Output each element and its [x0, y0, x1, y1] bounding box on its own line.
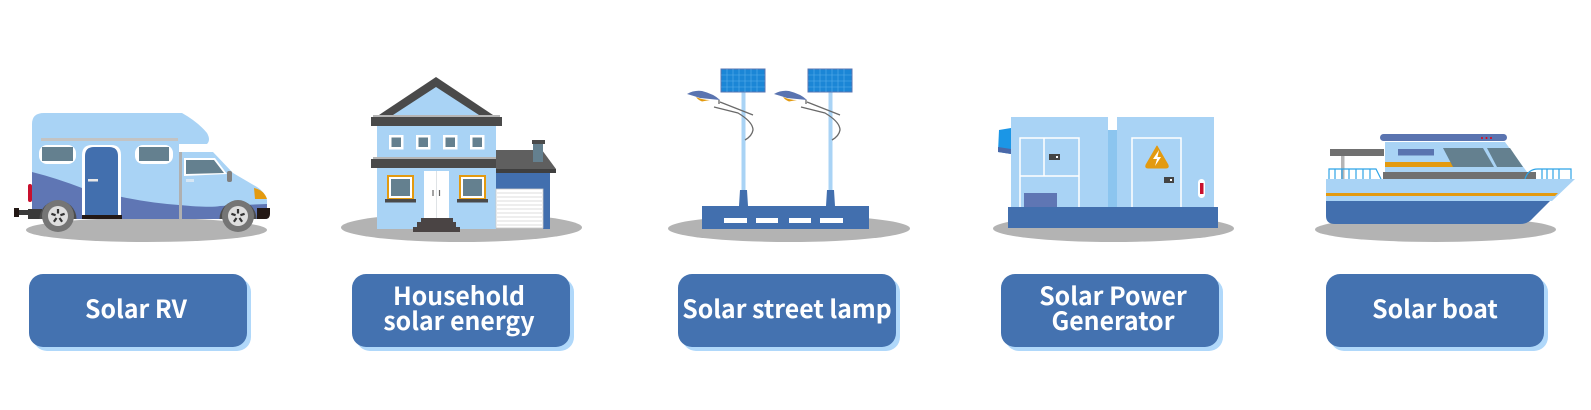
panel: household solar energy — [341, 77, 582, 351]
panel: solar street lamp — [668, 69, 910, 351]
ground shadow: generator — [993, 215, 1234, 242]
panel: solar RV — [14, 113, 270, 351]
icon: house — [371, 77, 556, 232]
button: Solar Power Generator: Solar Power — [1039, 277, 1187, 313]
button: Household solar energy — [352, 274, 574, 351]
icon: RV — [14, 113, 270, 232]
button: Solar Power Generator: Generator — [1051, 302, 1175, 338]
button: Solar Power Generator — [1001, 274, 1223, 351]
button: Solar boat: Solar boat — [1372, 290, 1498, 326]
button: Household solar energy: Household — [393, 277, 525, 313]
ground shadow: street — [668, 215, 910, 242]
button: Solar street lamp — [678, 274, 900, 351]
icon: boat — [1326, 134, 1575, 224]
button: Solar boat — [1326, 274, 1548, 351]
button: Solar RV: Solar RV — [85, 290, 188, 326]
button: Household solar energy: solar energy — [383, 302, 535, 338]
ground shadow: boat — [1315, 217, 1556, 242]
button: Solar RV — [29, 274, 251, 351]
ground shadow: RV — [26, 218, 267, 242]
ground shadow: house — [341, 213, 582, 242]
icon: generator — [998, 117, 1218, 228]
panel: solar power generator — [993, 117, 1234, 351]
button: Solar street lamp: Solar street lamp — [682, 290, 892, 326]
panel: solar boat — [1315, 134, 1575, 351]
icon: street lamps — [687, 69, 869, 229]
